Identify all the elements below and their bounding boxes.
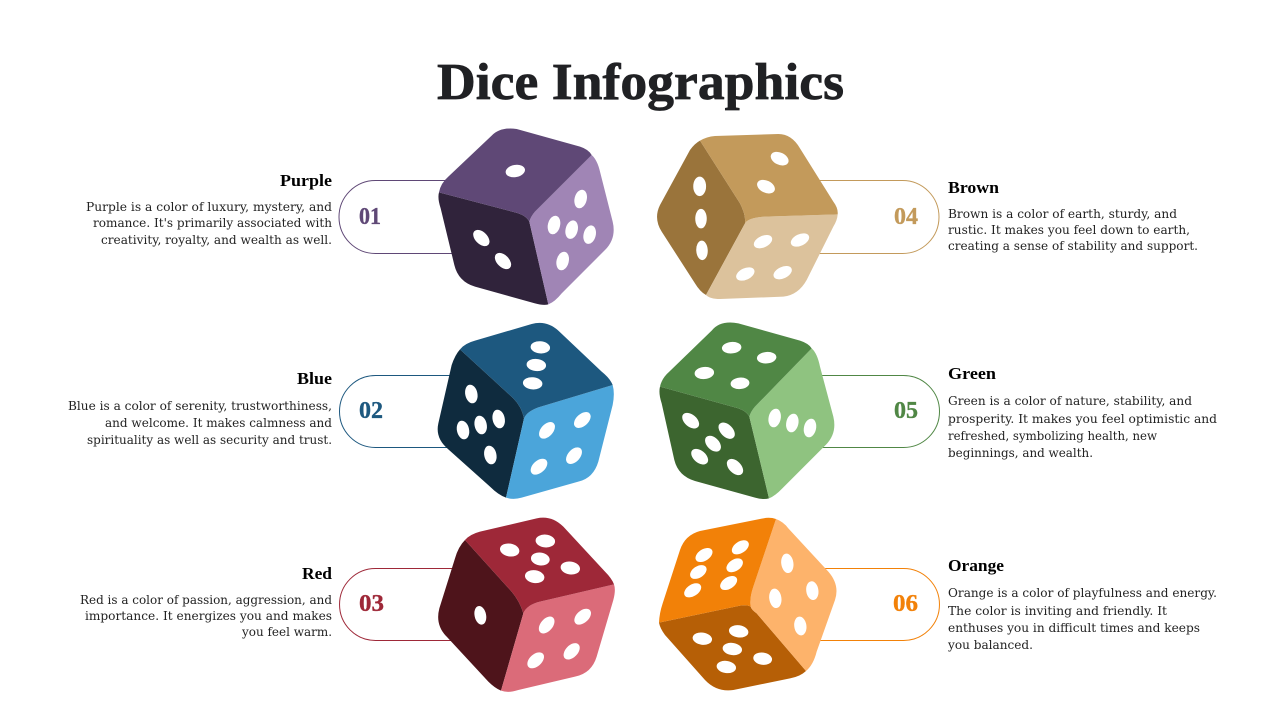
heading: green: Green — [948, 364, 997, 383]
icon: brown die — [657, 134, 838, 299]
text block: orange — [947, 586, 1217, 652]
text block: brown — [948, 207, 1198, 253]
text block: green: refreshed, symbolizing health, new — [948, 429, 1158, 443]
text block: brown: rustic. It makes you feel down to earth, — [948, 223, 1190, 237]
text block: red — [80, 593, 332, 639]
icon: orange die — [659, 518, 836, 690]
icon: purple die — [438, 129, 614, 305]
number: 02: 02 — [359, 398, 383, 424]
heading: red: Red — [302, 564, 333, 583]
heading: brown: Brown — [948, 178, 1000, 197]
number pill: 04 — [810, 180, 939, 254]
number: 06: 06 — [893, 591, 918, 617]
panel: red — [80, 518, 615, 692]
number pill: 06 — [810, 568, 939, 640]
text block: green: Green is a color of nature, stability, and — [948, 394, 1192, 408]
text block: brown: Brown is a color of earth, sturdy, and — [948, 207, 1177, 221]
title: Dice Infographics — [437, 54, 844, 111]
number pill: 01 — [339, 180, 460, 254]
number pill: 02 — [340, 376, 460, 448]
heading: purple: Purple — [280, 171, 332, 190]
text block: orange: you balanced. — [947, 638, 1033, 652]
text block: purple: romance. It's primarily associated with — [93, 216, 332, 230]
text block: green: prosperity. It makes you feel optimistic and — [948, 412, 1217, 426]
icon: blue die — [438, 323, 614, 499]
number: 01: 01 — [359, 204, 381, 230]
text block: red: Red is a color of passion, aggression, and — [80, 593, 332, 607]
number: 05: 05 — [894, 398, 918, 424]
text block: green — [948, 394, 1217, 460]
number pill: 05 — [810, 376, 940, 448]
text block: brown: creating a sense of stability and support. — [948, 239, 1198, 253]
text block: red: you feel warm. — [241, 625, 332, 639]
text block: green: beginnings, and wealth. — [948, 446, 1093, 460]
text block: purple: creativity, royalty, and wealth as well. — [101, 233, 332, 247]
number pill: 03 — [340, 568, 460, 640]
icon: red die — [438, 518, 615, 692]
text block: blue: spirituality as well as security and trust. — [87, 433, 332, 447]
panel: purple — [86, 129, 614, 305]
number: 04: 04 — [894, 204, 918, 230]
text block: purple: Purple is a color of luxury, mystery, and — [86, 200, 332, 214]
panel: brown — [657, 134, 1198, 299]
icon: green die — [659, 323, 834, 499]
number: 03: 03 — [359, 591, 384, 617]
panel: orange — [659, 518, 1217, 690]
text block: purple — [86, 200, 332, 247]
text block: blue: Blue is a color of serenity, trustworthiness, — [68, 399, 332, 413]
heading: blue: Blue — [297, 369, 332, 388]
text block: orange: enthuses you in difficult times and keeps — [948, 621, 1200, 635]
panel: green — [659, 323, 1217, 499]
text block: blue — [68, 399, 332, 447]
panel: blue — [68, 323, 614, 499]
text block: blue: and welcome. It makes calmness and — [105, 416, 332, 430]
text block: red: importance. It energizes you and makes — [85, 609, 332, 623]
text block: orange: The color is inviting and friendly. It — [948, 604, 1167, 618]
heading: orange: Orange — [948, 556, 1004, 575]
text block: orange: Orange is a color of playfulness and energy. — [948, 586, 1217, 600]
